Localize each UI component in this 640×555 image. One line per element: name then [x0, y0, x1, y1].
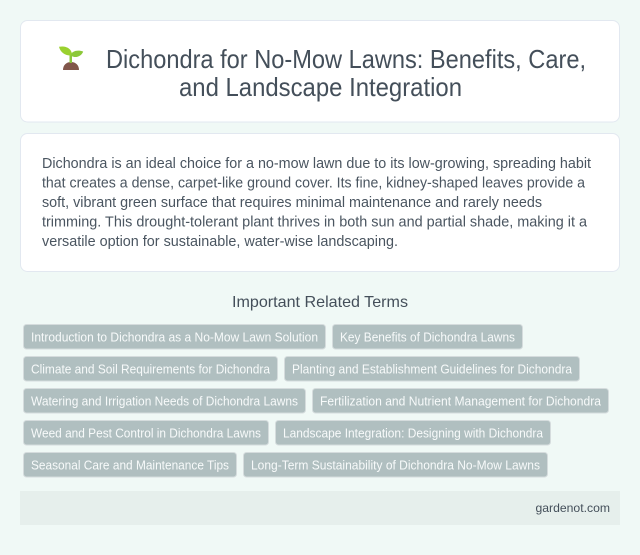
tag: weed and pest: Weed and Pest Control in Dichondra Lawns: [31, 426, 261, 440]
text block: description: soft, vibrant green surface that requires minimal maintenance and rarely needs: [42, 195, 542, 211]
tag: long-term sustainability: Long-Term Sustainability of Dichondra No-Mow Lawns: [251, 458, 540, 472]
panel: description card: [20, 134, 620, 272]
tag list: [24, 324, 608, 477]
tag: landscape integration: Landscape Integration: Designing with Dichondra: [283, 426, 543, 440]
icon: seedling: [59, 46, 83, 70]
tag: climate and soil: Climate and Soil Requirements for Dichondra: [31, 362, 270, 376]
tag: watering: Watering and Irrigation Needs of Dichondra Lawns: [31, 394, 298, 408]
text block: description: trimming. This drought-tolerant plant thrives in both sun and partial shade, making it a: [42, 214, 587, 230]
tag: long-term sustainability: [244, 452, 548, 477]
title: and Landscape Integration: [179, 72, 462, 102]
tag: introduction: [24, 324, 326, 349]
footer source text: gardenot.com: [536, 501, 610, 515]
tag: key benefits: [332, 324, 522, 349]
text block: description: Dichondra is an ideal choice for a no-mow lawn due to its low-growing, spreading habit: [42, 156, 591, 172]
tag: planting: Planting and Establishment Guidelines for Dichondra: [292, 362, 572, 376]
footer bar: [20, 491, 620, 525]
tag: weed and pest: [24, 420, 268, 445]
tag: seasonal care: Seasonal Care and Maintenance Tips: [31, 458, 229, 472]
panel: title card: [20, 20, 620, 122]
tag: fertilization: [312, 388, 608, 413]
title: [106, 44, 586, 102]
title: Dichondra for No-Mow Lawns: Benefits, Care,: [106, 44, 586, 74]
tag: landscape integration: [276, 420, 550, 445]
tag: fertilization: Fertilization and Nutrient Management for Dichondra: [320, 394, 601, 408]
tag: climate and soil: [24, 356, 278, 381]
heading: important related terms: Important Related Terms: [232, 294, 408, 311]
text block: description: versatile option for sustainable, water-wise landscaping.: [42, 234, 398, 250]
tag: planting: [284, 356, 580, 381]
tag: introduction: Introduction to Dichondra as a No-Mow Lawn Solution: [31, 330, 318, 344]
tag: watering: [24, 388, 306, 413]
tag: key benefits: Key Benefits of Dichondra Lawns: [340, 330, 515, 344]
text block: description: that creates a dense, carpet-like ground cover. Its fine, kidney-shaped leaves provide a: [42, 176, 585, 192]
tag: seasonal care: [24, 452, 236, 477]
text block: description: [42, 156, 591, 250]
